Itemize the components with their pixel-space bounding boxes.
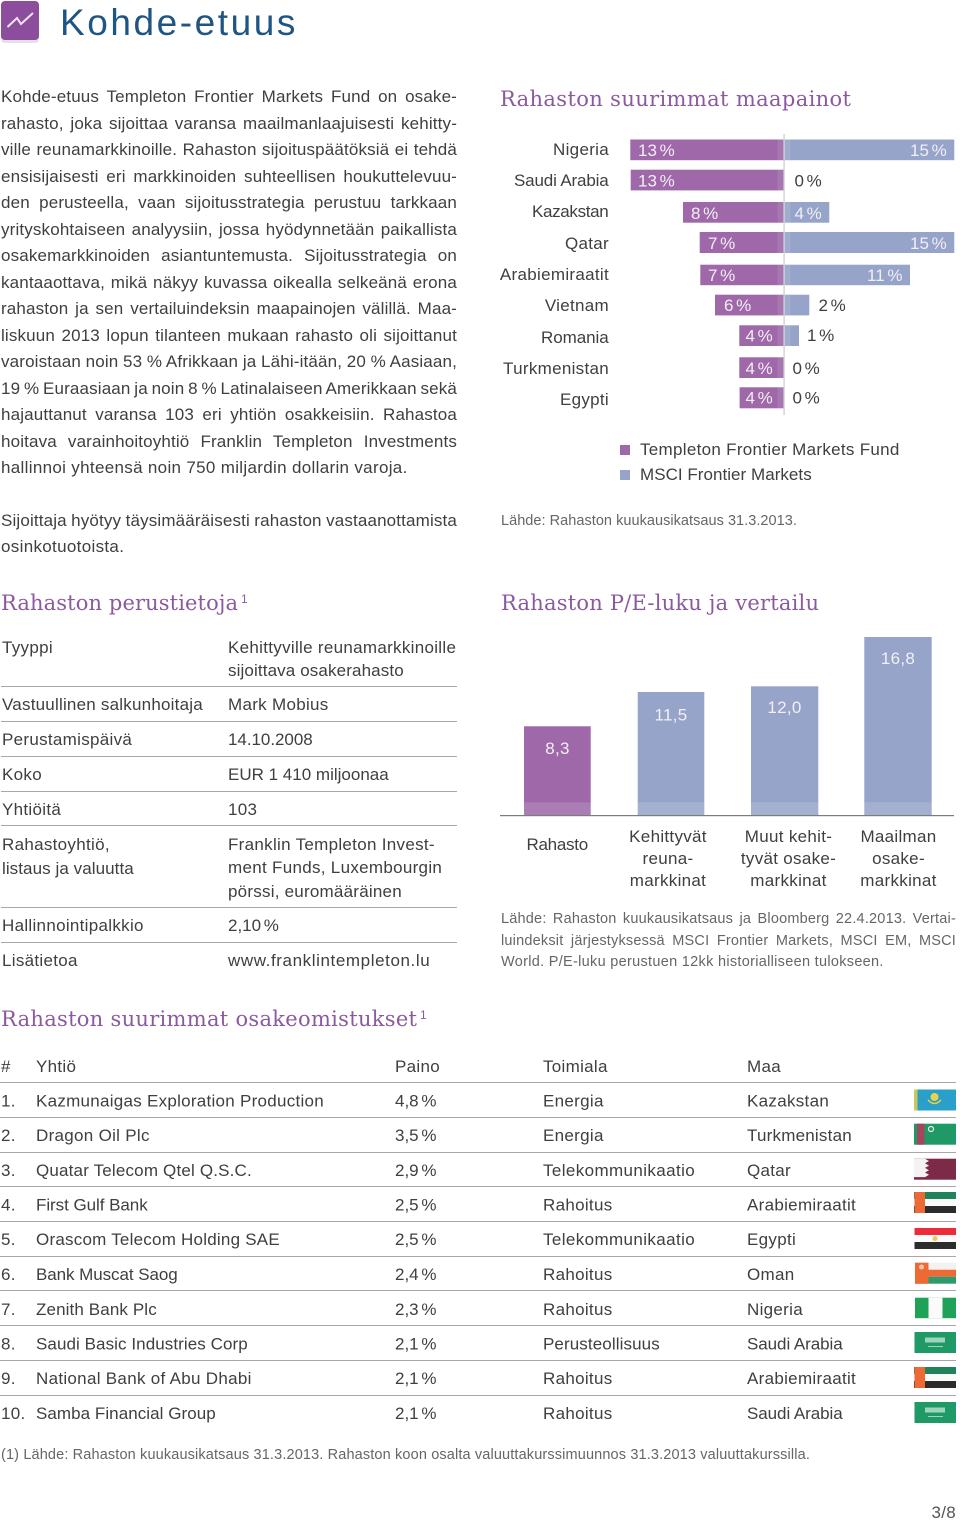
text block: fund description: kantaaottava, mikä näkyy kuvassa oikealla selkeänä erona (1, 272, 457, 292)
P/E bar chart: tyvät osake- (741, 849, 836, 868)
panel: P/E comparison (500, 591, 954, 890)
holdings table: Samba Financial Group (36, 1404, 216, 1423)
icon: rising line chart (1, 1, 39, 43)
icon: flag of Nigeria (915, 1298, 956, 1318)
holdings table: Dragon Oil Plc (36, 1126, 150, 1145)
P/E bar chart (500, 637, 954, 890)
holdings table: Rahoitus (543, 1300, 612, 1319)
fund facts table: Yhtiöitä (2, 800, 61, 819)
holdings table: Rahoitus (543, 1265, 612, 1284)
holdings table: Telekommunikaatio (543, 1161, 695, 1180)
holdings table: Paino (395, 1057, 440, 1076)
fund facts table: listaus ja valuutta (2, 859, 134, 878)
diverging bar chart: Saudi Arabia (514, 171, 609, 190)
legend: MSCI Frontier Markets (640, 465, 812, 484)
text block: dividends (1, 511, 457, 556)
icon: flag of the United Arab Emirates (914, 1192, 956, 1213)
panel: country weights (500, 87, 954, 529)
P/E bar chart: Kehittyvät (629, 827, 707, 846)
fund facts table: 14.10.2008 (228, 730, 313, 749)
fund facts table: EUR 1 410 miljoonaa (228, 765, 389, 784)
holdings table: 2,1 % (395, 1334, 436, 1354)
holdings table: Kazakstan (747, 1092, 829, 1110)
P/E bar chart: reuna- (643, 849, 693, 868)
text block: fund description: hallinnoi yhteensä noin 750 miljardin dollarin varoja. (1, 458, 408, 477)
holdings table: 9. (1, 1369, 16, 1388)
text block: dividends: Sijoittaja hyötyy täysimääräisesti rahaston vastaanottamista (1, 511, 457, 530)
fund facts table: Franklin Templeton Invest- (228, 835, 435, 854)
icon: flag of Oman (915, 1263, 956, 1284)
holdings table: Qatar (747, 1161, 791, 1180)
source note: P/E comparison (501, 911, 956, 970)
P/E bar chart: 16,8 (881, 649, 915, 668)
holdings table: # (1, 1057, 11, 1076)
source note: P/E comparison: World. P/E-luku perustuen 12kk historialliseen tulokseen. (501, 954, 884, 970)
holdings table: First Gulf Bank (36, 1196, 148, 1214)
fund facts table: Tyyppi (2, 638, 53, 657)
fund facts table: Hallinnointipalkkio (2, 916, 144, 935)
text block: fund description: osakemarkkinoiden asiantuntemusta. Sijoitusstrategia on (1, 246, 457, 265)
diverging bar chart: Kazakstan (532, 202, 609, 221)
holdings table: 2,4 % (395, 1265, 436, 1284)
P/E bar chart: 8,3 (545, 739, 570, 758)
icon: flag of Turkmenistan (914, 1124, 956, 1145)
holdings table: Yhtiö (36, 1057, 76, 1076)
diverging bar chart: 13 % (638, 172, 675, 190)
diverging bar chart: Arabiemiraatit (500, 265, 609, 284)
diverging bar chart: Nigeria (553, 140, 609, 159)
fund facts table: Rahastoyhtiö, (2, 835, 110, 854)
holdings table: Energia (543, 1126, 604, 1145)
diverging bar chart: 0 % (792, 388, 820, 408)
holdings table: Rahoitus (543, 1404, 612, 1423)
P/E bar chart: Muut kehit- (745, 827, 832, 846)
text block: fund description: rahasto, joka sijoittaa varansa maailmanlaajuisesti kehitty- (1, 114, 457, 132)
holdings table: Energia (543, 1092, 604, 1110)
holdings table: Egypti (747, 1230, 796, 1249)
diverging bar chart: Romania (541, 328, 609, 347)
text block: fund description: Kohde-etuus Templeton Frontier Markets Fund on osake- (1, 87, 457, 106)
source note: P/E comparison: Lähde: Rahaston kuukausikatsaus ja Bloomberg 22.4.2013. Vertai- (501, 911, 956, 927)
heading: fund facts: Rahaston perustietoja (1, 591, 238, 615)
holdings table: 6. (1, 1265, 16, 1284)
holdings table: Quatar Telecom Qtel Q.S.C. (36, 1161, 252, 1180)
holdings table: Arabiemiraatit (747, 1196, 856, 1214)
diverging bar chart (500, 134, 954, 415)
holdings table: Telekommunikaatio (543, 1230, 695, 1249)
icon: flag of Kazakhstan (914, 1090, 956, 1110)
fund facts table: Perustamispäivä (2, 730, 132, 749)
fund facts table: Koko (2, 765, 42, 784)
holdings table: Zenith Bank Plc (36, 1300, 157, 1319)
text block: fund description: yrityskohtaiseen analyysiin, jossa hyödynnetään paikallista (1, 220, 457, 238)
holdings table: Turkmenistan (747, 1126, 852, 1145)
text block: dividends: osinkotuotoista. (1, 537, 124, 556)
text block: fund description: hajauttanut varansa 103 eri yhtiön osakkeisiin. Rahastoa (1, 405, 457, 424)
P/E bar chart: markkinat (860, 871, 937, 890)
diverging bar chart: 6 % (724, 296, 751, 315)
title: Kohde-etuus (60, 2, 298, 43)
diverging bar chart: 0 % (794, 172, 822, 190)
icon: flag of Egypt (914, 1228, 956, 1249)
text block: fund description: hoitava varainhoitoyhtiö Franklin Templeton Investments (1, 432, 457, 450)
holdings table: 2,3 % (395, 1300, 436, 1319)
fund facts table: Kehittyville reunamarkkinoille (228, 638, 456, 657)
P/E bar chart: Maailman (860, 827, 937, 846)
holdings table: Kazmunaigas Exploration Production (36, 1092, 324, 1110)
holdings table: Toimiala (543, 1057, 608, 1076)
holdings table: Maa (747, 1057, 781, 1076)
heading: largest holdings: 1 (420, 1008, 427, 1022)
P/E bar chart: markkinat (750, 871, 827, 890)
holdings table: 1. (1, 1092, 16, 1110)
fund facts table: ment Funds, Luxembourgin (228, 858, 442, 877)
fund facts table (1, 638, 457, 970)
diverging bar chart: 4 % (746, 326, 773, 346)
holdings table: Rahoitus (543, 1196, 612, 1214)
panel: fund facts (1, 591, 457, 970)
holdings table: 2,9 % (395, 1161, 436, 1180)
heading: P/E comparison: Rahaston P/E-luku ja vertailu (501, 591, 819, 615)
diverging bar chart: 1 % (807, 326, 834, 345)
text block: fund description: ensisijaisesti eri markkinoiden suhteellisen houkuttelevuu- (1, 166, 457, 186)
holdings table: 2,1 % (395, 1369, 436, 1388)
diverging bar chart: 4 % (746, 388, 773, 408)
P/E bar chart: markkinat (630, 871, 706, 890)
P/E bar chart: Rahasto (526, 835, 588, 854)
holdings table: 3. (1, 1161, 16, 1180)
icon: flag of Saudi Arabia (914, 1402, 956, 1423)
diverging bar chart: 11 % (867, 266, 902, 285)
fund facts table: Lisätietoa (2, 951, 78, 970)
diverging bar chart: Vietnam (545, 296, 609, 315)
text block: fund description: liskuun 2013 lopun tilanteen mukaan rahasto oli sijoittanut (1, 326, 457, 344)
P/E bar chart: 11,5 (654, 706, 688, 724)
source note: P/E comparison: luindeksit järjestyksessä MSCI Frontier Markets, MSCI EM, MSCI (501, 932, 956, 948)
holdings table: National Bank of Abu Dhabi (36, 1369, 252, 1388)
fund facts table: pörssi, euromääräinen (228, 882, 402, 901)
fund facts table: www.franklintempleton.lu (227, 951, 430, 970)
holdings table: 4. (1, 1196, 16, 1214)
text block: fund description: varoistaan noin 53 % Afrikkaan ja Lähi-itään, 20 % Aasiaan, (1, 352, 457, 371)
diverging bar chart: 7 % (708, 266, 735, 285)
holdings table: Perusteollisuus (543, 1334, 660, 1354)
fund facts table: Vastuullinen salkunhoitaja (2, 695, 203, 714)
holdings table: 4,8 % (395, 1092, 436, 1110)
text block: fund description: den perusteella, vaan sijoitusstrategia perustuu tarkkaan (1, 193, 457, 212)
text block: fund description: 19 % Euraasiaan ja noin 8 % Latinalaiseen Amerikkaan sekä (1, 378, 457, 398)
diverging bar chart: 15 % (910, 141, 947, 160)
diverging bar chart: Qatar (565, 234, 609, 253)
legend (620, 440, 900, 484)
footnote: (1) Lähde: Rahaston kuukausikatsaus 31.3.2013. Rahaston koon osalta valuuttakurssimuunnos 31.3.2013 valuuttakurssilla. (1, 1447, 810, 1463)
legend: Templeton Frontier Markets Fund (640, 440, 900, 459)
fund facts table: 103 (228, 800, 257, 819)
holdings table (0, 1057, 956, 1423)
holdings table: 3,5 % (395, 1126, 436, 1145)
icon: flag of Saudi Arabia (914, 1332, 956, 1353)
P/E bar chart: osake- (872, 849, 925, 868)
diverging bar chart: 4 % (794, 204, 822, 223)
text block: fund description: ville reunamarkkinoille. Rahaston sijoituspäätöksiä ei tehdä (1, 140, 457, 159)
holdings table: 8. (1, 1334, 16, 1354)
fund facts table: 2,10 % (228, 916, 279, 935)
fund facts table: sijoittava osakerahasto (228, 661, 404, 680)
icon: flag of Qatar (914, 1159, 956, 1180)
diverging bar chart: Egypti (560, 390, 609, 409)
holdings table: 2. (1, 1126, 16, 1145)
panel: largest holdings (0, 1007, 956, 1423)
source note: country weights: Lähde: Rahaston kuukausikatsaus 31.3.2013. (501, 513, 797, 529)
holdings table: Arabiemiraatit (747, 1369, 856, 1388)
holdings table: 7. (1, 1300, 16, 1319)
heading: country weights: Rahaston suurimmat maapainot (500, 87, 852, 111)
holdings table: 2,5 % (395, 1230, 436, 1249)
holdings table: Saudi Basic Industries Corp (36, 1334, 248, 1354)
holdings table: 5. (1, 1230, 16, 1249)
diverging bar chart: 4 % (746, 359, 773, 378)
holdings table: 2,5 % (395, 1196, 436, 1214)
fund facts table: Mark Mobius (228, 695, 329, 714)
heading: largest holdings: Rahaston suurimmat osakeomistukset (1, 1007, 418, 1031)
diverging bar chart: 7 % (708, 234, 735, 253)
text block: fund description (1, 87, 457, 477)
holdings table: Rahoitus (543, 1369, 612, 1388)
diverging bar chart: 2 % (818, 296, 846, 315)
heading: fund facts: 1 (241, 592, 248, 606)
diverging bar chart: 0 % (792, 359, 820, 378)
holdings table: Bank Muscat Saog (36, 1265, 178, 1284)
holdings table: Orascom Telecom Holding SAE (36, 1230, 280, 1249)
holdings table: Saudi Arabia (747, 1404, 843, 1423)
diverging bar chart: 8 % (691, 204, 718, 223)
diverging bar chart: Turkmenistan (503, 359, 609, 378)
holdings table: Saudi Arabia (747, 1334, 843, 1354)
holdings table: Oman (747, 1265, 794, 1284)
diverging bar chart: 13 % (638, 141, 675, 160)
P/E bar chart: 12,0 (767, 698, 802, 717)
holdings table: 2,1 % (395, 1404, 436, 1423)
icon: flag of the United Arab Emirates (914, 1367, 956, 1388)
holdings table: 10. (1, 1404, 26, 1423)
diverging bar chart: 15 % (910, 234, 947, 253)
text block: fund description: rahaston ja sen vertailuindeksin maapainojen välillä. Maa- (1, 299, 457, 318)
holdings table: Nigeria (747, 1300, 803, 1319)
